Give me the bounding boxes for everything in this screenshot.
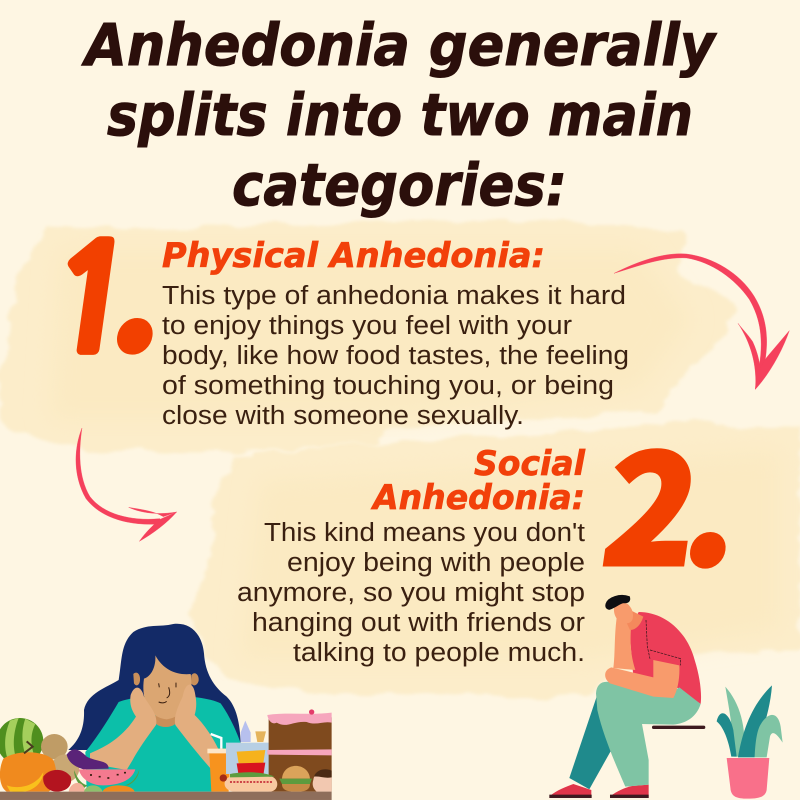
desserts: [241, 721, 251, 742]
small vegetables: [69, 783, 85, 792]
number 1: 1: [37, 229, 146, 374]
potato: [41, 734, 68, 759]
banana: [7, 772, 43, 792]
text block: social anhedonia description: [237, 519, 586, 667]
stool: [652, 726, 705, 729]
illustration: sad woman with food on table: [0, 624, 332, 800]
shirt: [629, 612, 701, 704]
woman's neck: [155, 713, 177, 727]
text block: physical anhedonia description: to enjoy things you feel with your: [162, 312, 573, 340]
cake: [269, 717, 332, 792]
title: categories:: [232, 151, 567, 219]
head: [614, 602, 633, 623]
drink cup: [207, 749, 233, 792]
donuts: [313, 770, 332, 792]
front leg: [596, 682, 701, 787]
brush background: lower panel: [189, 423, 800, 697]
heading: social anhedonia: Social: [474, 444, 586, 484]
apple: [43, 770, 71, 792]
eggplant: [67, 749, 109, 769]
illustration: man sitting with head on hand: [549, 595, 705, 798]
sleeve line: [646, 620, 681, 665]
pot: [727, 758, 769, 799]
woman's face: [143, 655, 192, 719]
illustration: potted plant: [717, 685, 783, 799]
shoes: [549, 784, 591, 798]
text block: physical anhedonia description: [162, 282, 629, 430]
back leg: [569, 697, 611, 789]
pumpkin: [0, 752, 56, 792]
hair: [606, 595, 630, 609]
watermelon slice: [79, 769, 135, 785]
burger: [282, 766, 310, 779]
text block: physical anhedonia description: body, like how food tastes, the feeling: [162, 342, 629, 370]
table: [0, 792, 332, 800]
plant leaves: [725, 687, 745, 757]
hot dog: [225, 777, 277, 792]
arrow: curved from physical to woman: [76, 428, 177, 541]
brush background: upper panel: [0, 222, 735, 452]
text block: social anhedonia description: talking to people much.: [293, 639, 585, 667]
woman's shirt: [85, 696, 245, 792]
heading: social anhedonia: Anhedonia:: [370, 478, 585, 518]
text block: social anhedonia description: anymore, so you might stop: [237, 579, 585, 607]
upper arm: [605, 660, 679, 698]
text block: social anhedonia description: hanging out with friends or: [252, 609, 586, 637]
fries: [237, 750, 265, 763]
arrow: curved from physical to social: [614, 254, 789, 389]
text block: social anhedonia description: enjoy being with people: [287, 549, 585, 577]
title: [81, 11, 717, 219]
woman's arms and hands: [90, 688, 156, 770]
number 2: 2: [592, 389, 715, 609]
text block: social anhedonia description: This kind means you don't: [264, 519, 585, 547]
woman's hair: [68, 624, 258, 750]
forearm and neck: [613, 613, 635, 670]
text block: physical anhedonia description: close with someone sexually.: [162, 402, 524, 430]
heading: physical anhedonia: Physical Anhedonia:: [162, 236, 545, 276]
title: splits into two main: [107, 81, 693, 149]
watermelon: [0, 718, 43, 765]
text block: physical anhedonia description: of something touching you, or being: [162, 372, 614, 400]
heading: social anhedonia: [370, 444, 586, 518]
number 1: .: [100, 175, 184, 395]
number 2: .: [673, 389, 757, 609]
title: Anhedonia generally: [81, 11, 717, 79]
text block: physical anhedonia description: This type of anhedonia makes it hard: [162, 282, 626, 310]
